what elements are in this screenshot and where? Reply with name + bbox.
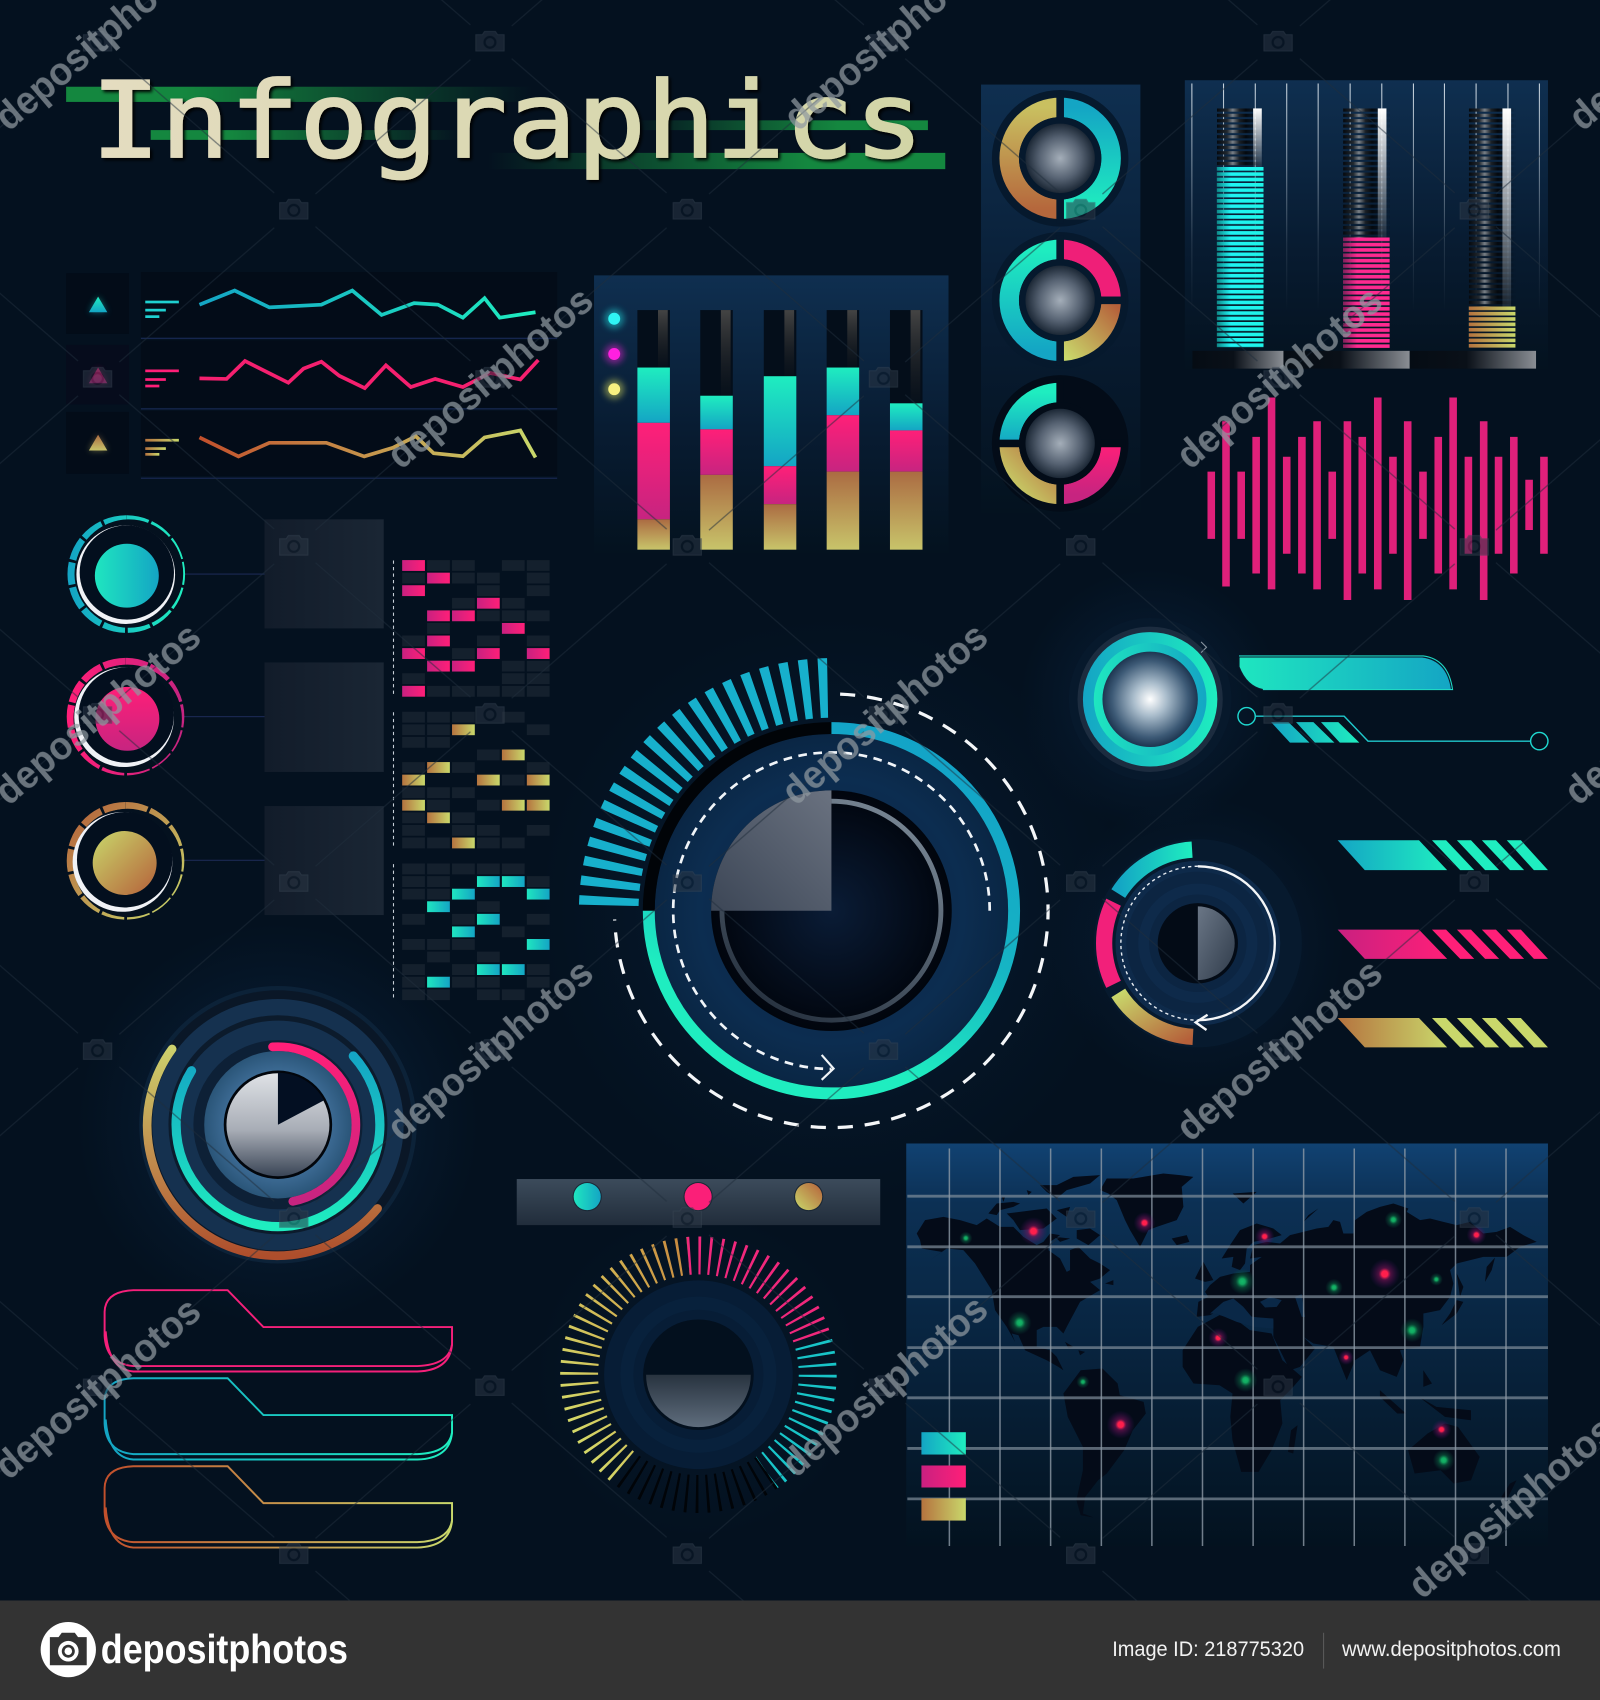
panel: three status rings — [70, 519, 264, 917]
footer logo — [41, 1622, 348, 1677]
panel: stacked bar chart — [594, 275, 949, 553]
teal arc — [176, 1056, 380, 1227]
heatmap: teal block — [393, 864, 550, 1000]
donut 1 — [992, 90, 1128, 227]
bar 3 — [764, 310, 796, 550]
center half ball — [1158, 903, 1238, 983]
outline label: orange — [105, 1466, 452, 1548]
ring layers — [139, 986, 417, 1264]
donut 2 — [992, 232, 1128, 369]
panel: world map — [906, 1143, 1548, 1546]
row: orange line chart — [66, 411, 557, 479]
progress stripes: pink — [1338, 930, 1548, 959]
website: www.depositphotos.com — [1341, 1638, 1561, 1661]
green bars — [66, 87, 945, 169]
panel: line charts — [66, 272, 557, 479]
pill outline — [1239, 656, 1453, 690]
vertical guide lines — [1191, 83, 1540, 311]
footer logo: depositphotos — [101, 1626, 348, 1672]
ticks — [579, 1255, 818, 1494]
map hot spots — [959, 1211, 1486, 1471]
ring orange — [70, 806, 182, 917]
heatmap: pink block — [393, 560, 550, 697]
background glows — [77, 569, 1344, 1537]
bar with three buttons — [517, 1179, 880, 1225]
bar 5 — [890, 310, 922, 550]
inner disc — [655, 734, 1008, 1087]
pie ball — [224, 1071, 332, 1179]
radial tick dial — [579, 1255, 818, 1494]
concentric ring gauge — [139, 986, 417, 1264]
panel: equalizer columns — [1185, 80, 1548, 369]
spoke fan — [609, 688, 831, 905]
panel: grey squares — [264, 519, 384, 915]
half ball — [643, 1319, 754, 1430]
progress ring — [649, 728, 1014, 1093]
black quadrant arc — [649, 728, 831, 911]
continents: eurasia — [1195, 1192, 1537, 1380]
dial disc — [604, 1280, 793, 1469]
row: teal line chart — [66, 272, 557, 339]
outline label: teal — [105, 1378, 452, 1460]
separator — [1323, 1633, 1324, 1669]
bar 4 — [827, 310, 859, 550]
column orange — [1410, 108, 1536, 369]
watermark text: depositphotos — [1168, 951, 1391, 1150]
title with green glitch bars — [66, 59, 945, 182]
watermark text: depositphotos — [379, 951, 601, 1150]
donut 3 — [992, 375, 1128, 512]
glowing button gauge — [1069, 618, 1231, 781]
continents: southern lands — [1063, 1315, 1517, 1518]
pink arc — [1104, 902, 1114, 984]
teal arc — [1118, 850, 1192, 894]
connectors — [183, 574, 264, 861]
pink arc — [273, 1047, 356, 1201]
center dial — [711, 790, 952, 1031]
progress stripes: yellow — [1338, 1018, 1548, 1047]
outer dashed arc — [615, 694, 1048, 1128]
footer bar — [0, 1600, 1600, 1700]
bar 2 — [700, 310, 733, 550]
column cyan — [1192, 108, 1283, 369]
heatmap: orange block — [393, 712, 550, 848]
indicator lights — [604, 309, 624, 399]
outline label: pink — [105, 1290, 452, 1371]
bar 1 — [637, 310, 670, 550]
progress stripes: teal — [1338, 840, 1548, 870]
connector with stripes — [1238, 708, 1548, 750]
secondary gauge — [1094, 839, 1302, 1047]
image id: Image ID: 218775320 — [1112, 1638, 1304, 1661]
watermark text: depositphotos — [774, 1287, 996, 1486]
column pink — [1283, 108, 1410, 369]
title text: Infographics — [91, 59, 924, 182]
map legend — [921, 1432, 966, 1521]
watermark text: depositphotos — [379, 279, 601, 477]
white arc with arrow — [1121, 866, 1275, 1030]
watermark text: depositphotos — [774, 615, 996, 813]
inner dashed arc with arrow — [673, 752, 990, 1080]
yellow arc — [1118, 993, 1193, 1037]
main radial gauge — [609, 688, 1048, 1128]
orange arc — [147, 1049, 378, 1256]
inland seas — [1210, 1294, 1305, 1329]
chart: pink waveform — [1211, 397, 1544, 600]
watermark text: depositphotos — [1168, 279, 1391, 477]
continents: americas and greenland — [917, 1173, 1193, 1370]
panel: donut column — [981, 85, 1140, 513]
ring teal — [71, 519, 183, 629]
ring pink — [70, 661, 182, 773]
grid lines — [907, 1148, 1548, 1546]
pill label — [1239, 657, 1451, 690]
row: pink line chart — [66, 340, 557, 409]
